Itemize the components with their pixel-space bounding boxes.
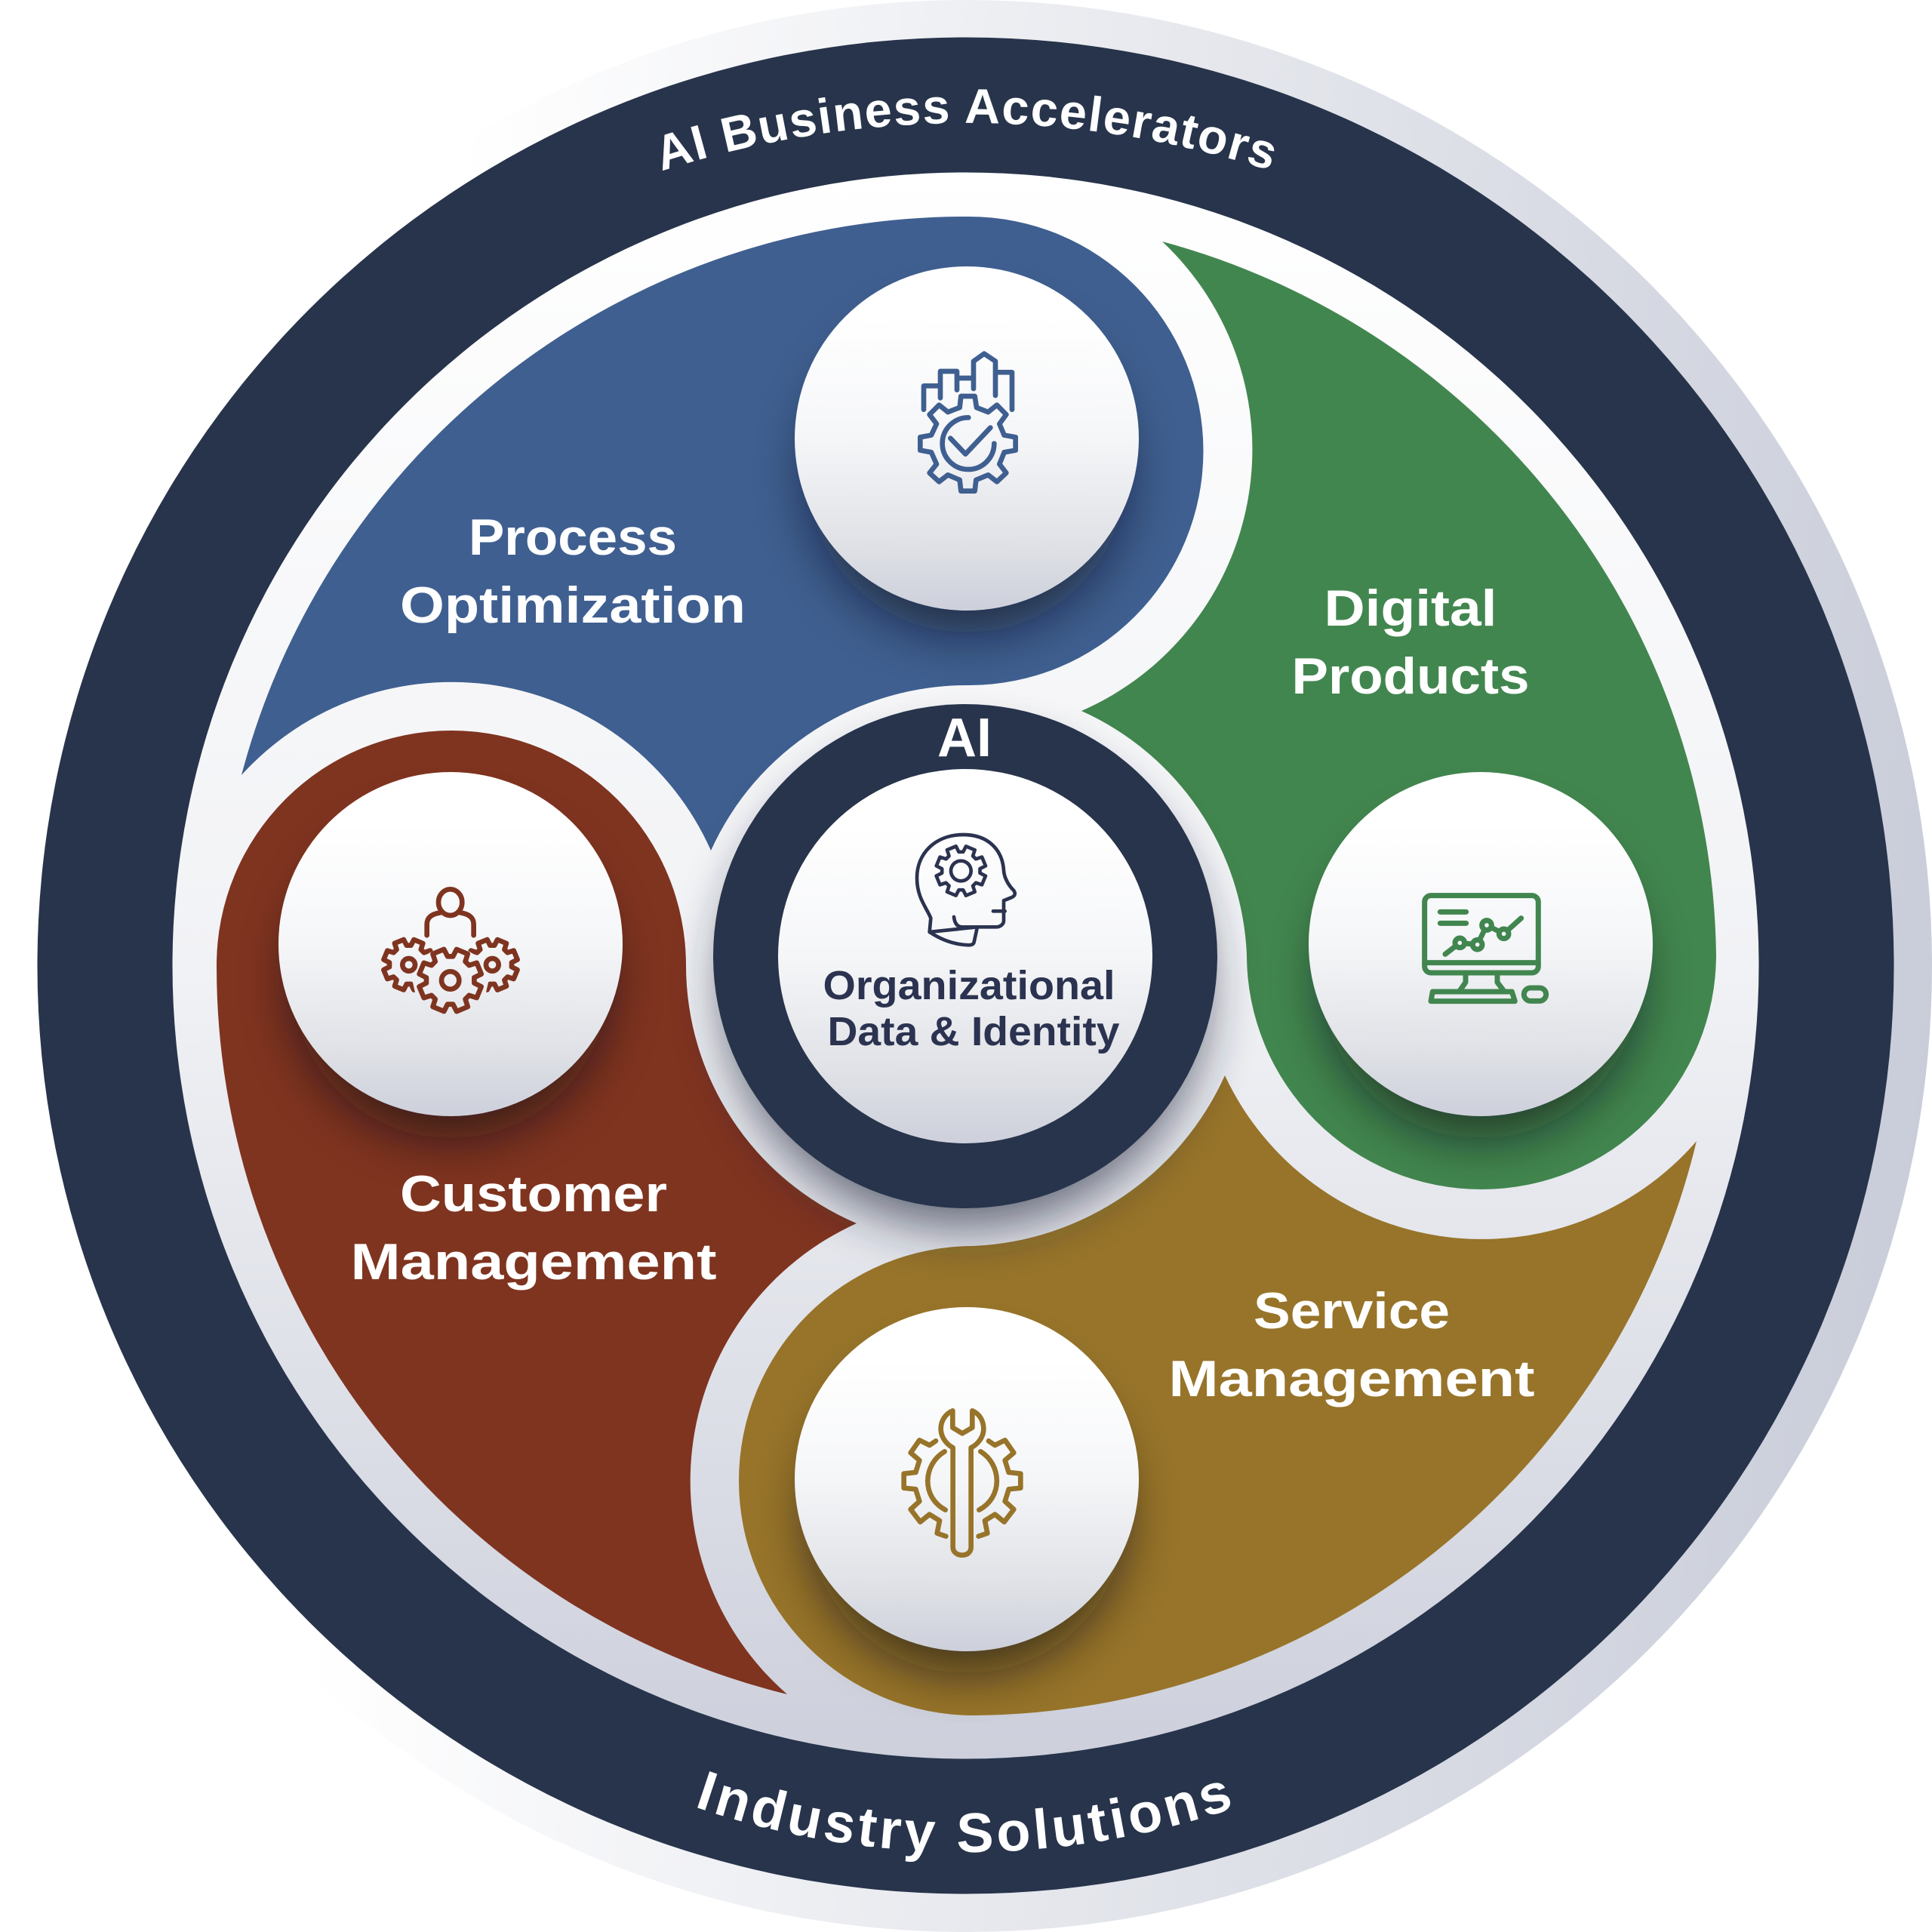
icon: person with gears	[381, 887, 520, 1014]
icon disc	[1309, 772, 1653, 1116]
panel: Service Management	[739, 1075, 1697, 1715]
ring heading: AI Business Accelerators: AI Business Accelerators	[663, 89, 1274, 171]
icon disc	[795, 266, 1139, 611]
icon disc	[278, 772, 623, 1116]
icon disc	[795, 1307, 1139, 1651]
panel: Digital Products	[1081, 242, 1716, 1189]
ring shadow	[724, 743, 1207, 1226]
icon: head with gear	[917, 835, 1015, 945]
petal: gold	[739, 1075, 1697, 1715]
panel: AI core	[713, 704, 1217, 1226]
label: Service Management: Service	[1254, 1282, 1450, 1340]
label: Digital Products: Digital	[1324, 580, 1497, 637]
label: Customer Management: Customer	[400, 1165, 667, 1223]
disc shadow	[808, 315, 1125, 632]
disc shadow	[292, 821, 609, 1138]
label: Service Management: Management	[1168, 1350, 1535, 1407]
label: Organizational Data & Identity: Organizational	[823, 963, 1115, 1008]
label: Process Optimization: Process	[469, 509, 677, 566]
label: Customer Management: Management	[350, 1233, 717, 1291]
panel: Process Optimization	[242, 217, 1203, 851]
disc shadow	[1322, 821, 1639, 1138]
icon: monitor with chart	[1425, 896, 1546, 1001]
label: Digital Products: Products	[1292, 648, 1529, 705]
ring heading: Industry Solutions: Industry Solutions	[697, 1771, 1230, 1862]
disc shadow	[808, 1356, 1125, 1673]
petal: blue	[242, 217, 1203, 851]
panel: Customer Management	[217, 731, 857, 1694]
heading: AI: AI	[937, 708, 992, 768]
icon: gear with city and check	[920, 354, 1016, 491]
petal: green	[1081, 242, 1716, 1189]
inner light disc	[172, 172, 1758, 1758]
navy ring	[713, 704, 1217, 1208]
icon: wrench and gear	[904, 1411, 1020, 1555]
core disc	[778, 769, 1152, 1143]
petal: brown	[217, 731, 857, 1694]
label: Process Optimization: Optimization	[400, 577, 746, 634]
label: Organizational Data & Identity: Data & Identity	[827, 1009, 1120, 1054]
